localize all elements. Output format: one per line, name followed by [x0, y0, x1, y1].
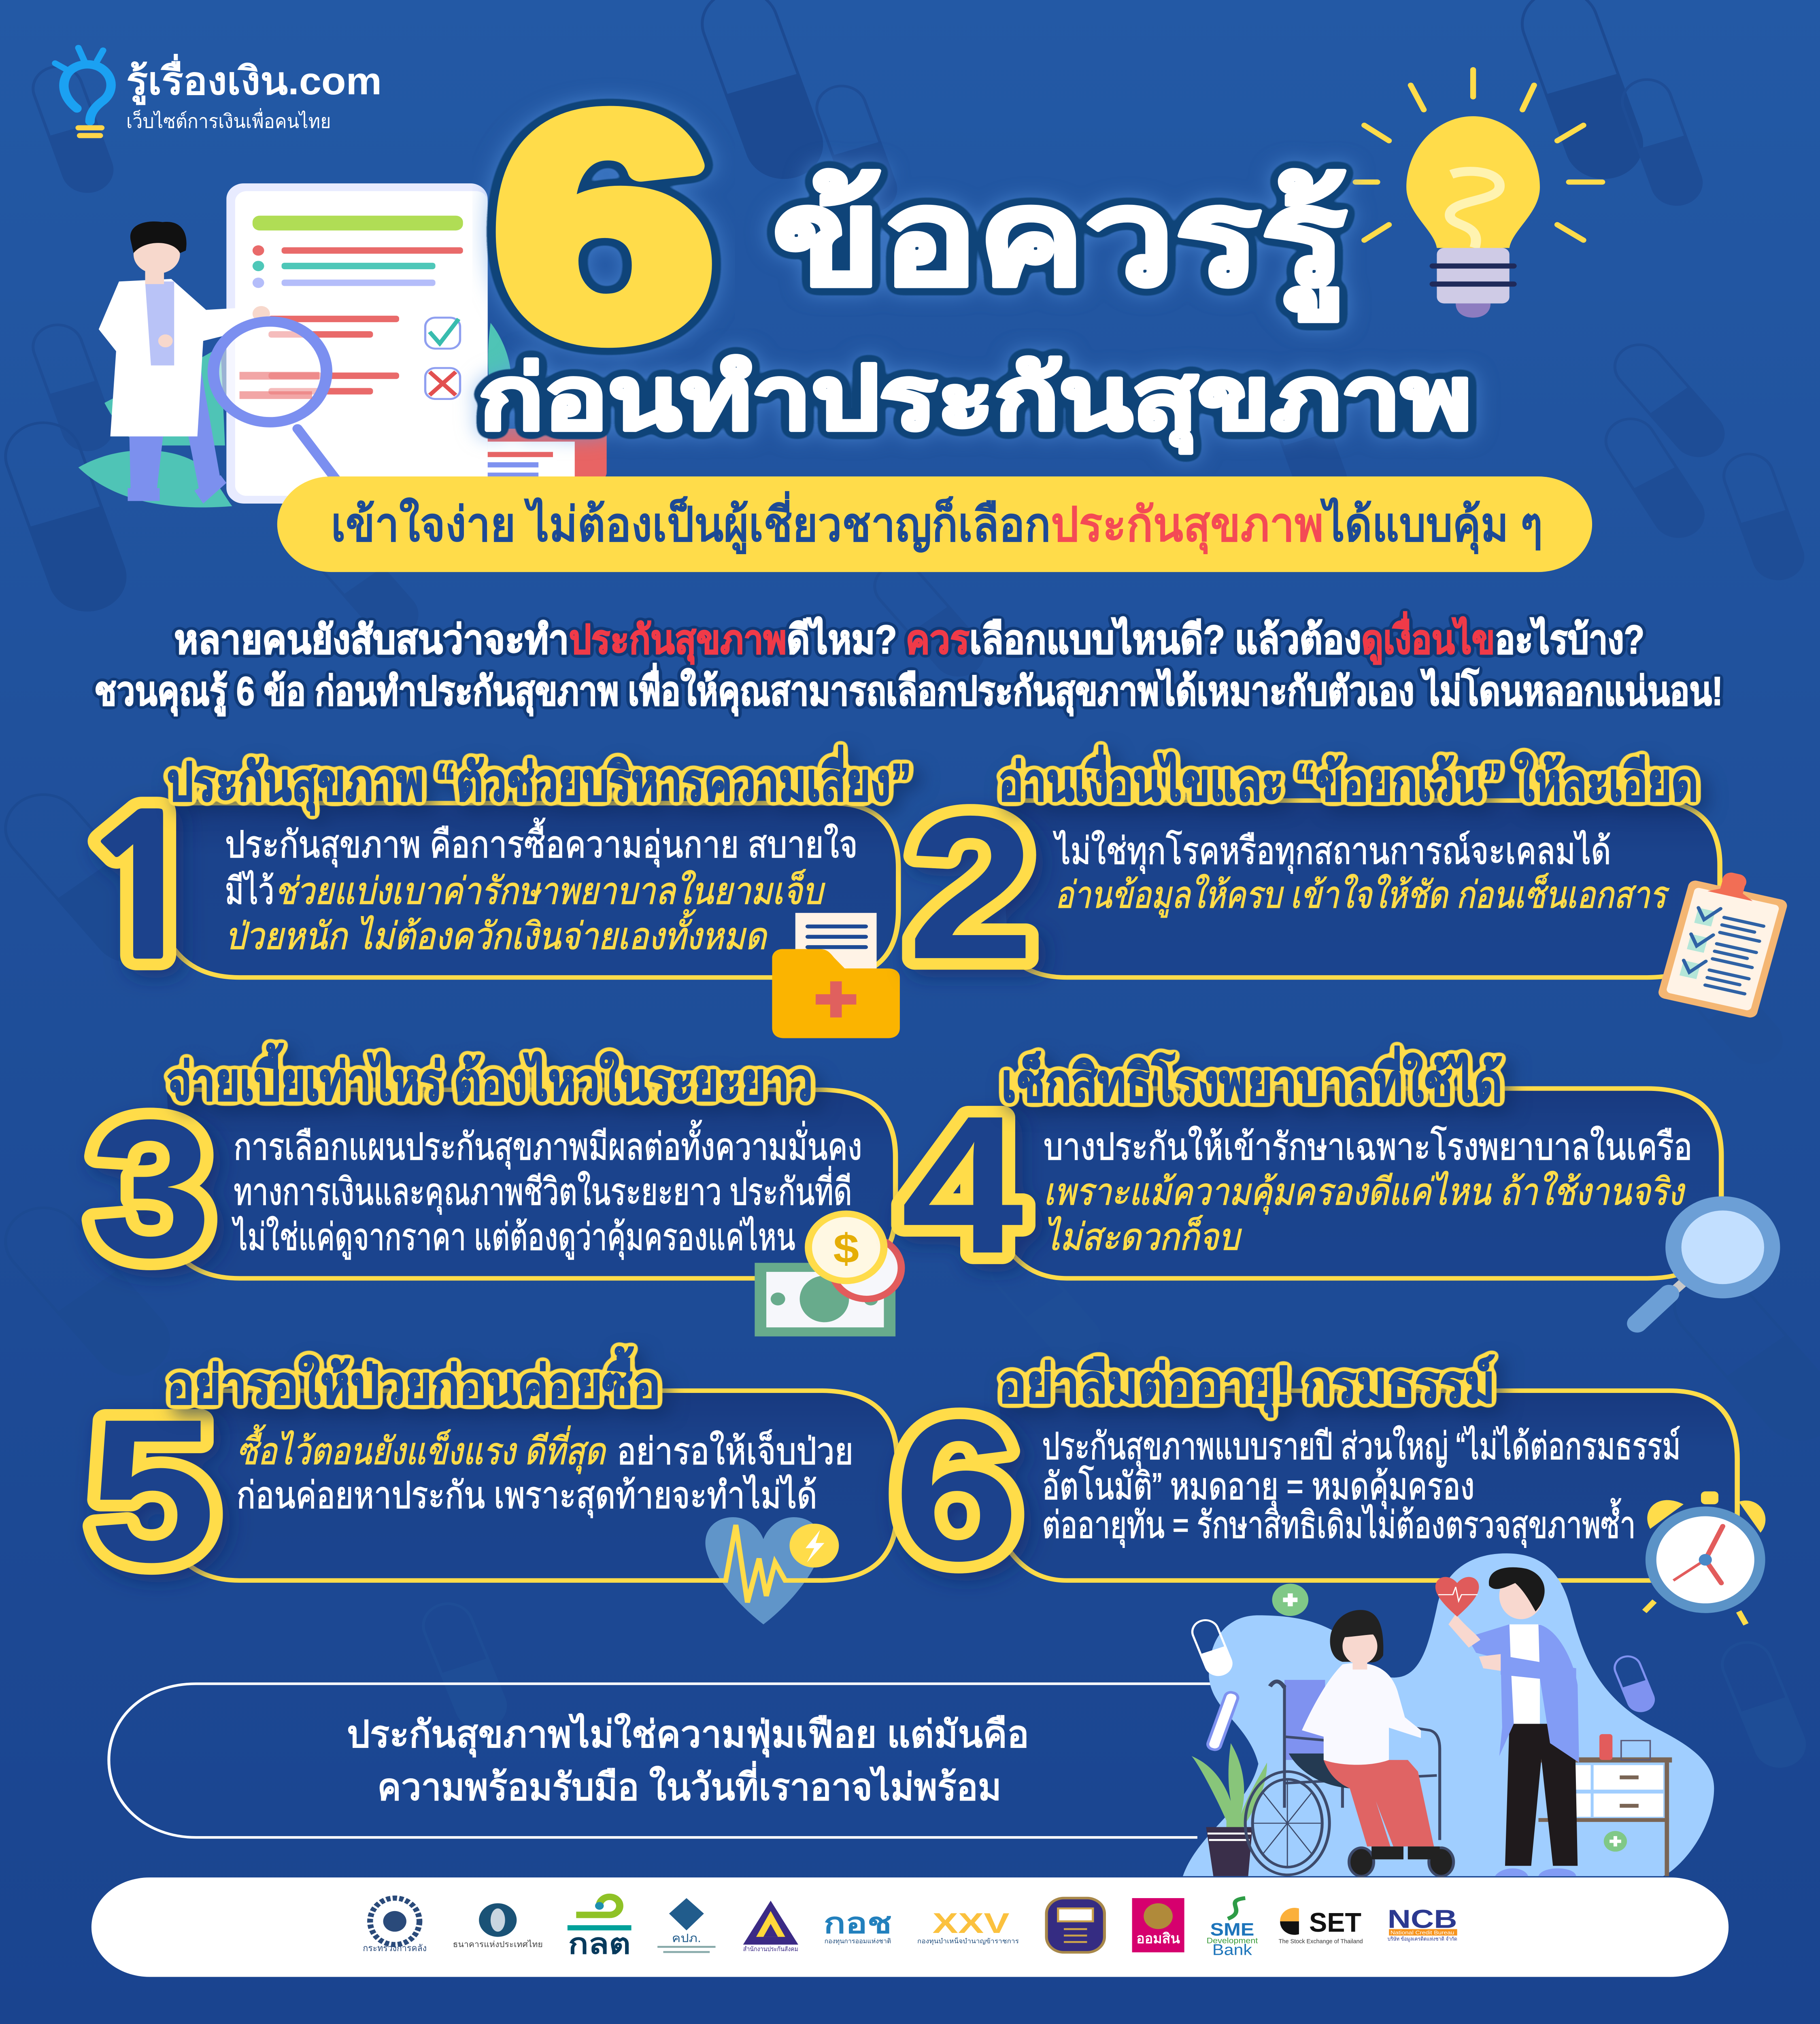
body 1: ช่วยแบ่งเบาค่ารักษาพยาบาลในยามเจ็บ [274, 869, 825, 912]
logo: คปภ: คปภ. [672, 1932, 701, 1945]
small plus badge [1604, 1831, 1627, 1852]
title numeral 6: 6 [494, 52, 713, 401]
logo tagline: เว็บไซต์การเงินเพื่อคนไทย [126, 108, 331, 132]
logo: รู้เรื่องเงิน.com [55, 48, 382, 136]
icon: heart with pulse [705, 1517, 839, 1624]
callout [109, 1684, 1212, 1837]
icon: alarm clock [1644, 1491, 1765, 1624]
intro paragraph: ประกันสุขภาพ [569, 618, 787, 665]
illustration: doctor with checklist board [79, 183, 607, 508]
logo: ออมสิน [1132, 1898, 1184, 1952]
panel 1 [78, 745, 912, 1038]
icon: clipboard [1657, 864, 1793, 1019]
logo: NCB [1388, 1905, 1457, 1942]
panel 5 [89, 1346, 897, 1624]
logo: SET [1279, 1907, 1363, 1945]
callout text: ความพร้อมรับมือ ในวันที่เราอาจไม่พร้อม [377, 1761, 1001, 1808]
intro paragraph: เลือกแบบไหนดี? แล้วต้อง [970, 617, 1361, 662]
intro paragraph: หลายคนยังสับสนว่าจะทำ [174, 618, 569, 662]
icon: money and coin [755, 1214, 901, 1336]
doctor [1435, 1567, 1579, 1876]
plus badge [1272, 1584, 1308, 1616]
logo: SME Development Bank: SME [1210, 1920, 1254, 1940]
logo: NCB: National Credit Bureau [1391, 1930, 1454, 1935]
body 3: การเลือกแผนประกันสุขภาพมีผลต่อทั้งความมั่นคง [234, 1120, 862, 1169]
panel 4 [901, 1046, 1772, 1324]
logo: triangle office: สำนักงานประกันสังคม [743, 1945, 798, 1953]
logo: SET: The Stock Exchange of Thailand [1279, 1938, 1363, 1945]
subtitle text [331, 491, 1543, 554]
heading 4: เช็กสิทธิโรงพยาบาลที่ใช้ได้ [1001, 1046, 1502, 1113]
number 6: 6 [893, 1378, 1019, 1603]
subtitle text: ได้แบบคุ้ม ๆ [1320, 497, 1543, 554]
capsule white [1189, 1617, 1235, 1678]
intro paragraph: ดีไหม? [787, 617, 897, 662]
body 3: ไม่ใช่แค่ดูจากราคา แต่ต้องดูว่าคุ้มครองแค่ไหน [232, 1216, 795, 1260]
body 4: ไม่สะดวกก็จบ [1044, 1215, 1242, 1258]
intro paragraph: อะไรบ้าง? [1495, 617, 1644, 662]
number 2: 2 [907, 774, 1035, 1001]
body 3: ทางการเงินและคุณภาพชีวิตในระยะยาว ประกันที่ดี [234, 1166, 852, 1215]
number 1: 1 [78, 793, 210, 986]
body 1: มีไว้ [225, 870, 274, 912]
logo: ออมสิน: ออมสิน [1136, 1930, 1180, 1946]
panel 2 [907, 745, 1793, 1019]
logo: กบข: กองทุนบำเหน็จบำนาญข้าราชการ [917, 1937, 1019, 1945]
number 5: 5 [89, 1377, 216, 1605]
body 2 [1053, 830, 1669, 918]
illustration: doctor and patient in wheelchair [1183, 1553, 1714, 1876]
title [479, 52, 1472, 453]
logo: ธนาคารแห่งประเทศไทย: ธนาคารแห่งประเทศไทย [453, 1939, 543, 1949]
body 4 [1044, 1126, 1692, 1258]
leaves [79, 346, 232, 508]
body 6: อัตโนมัติ” หมดอายุ = หมดคุ้มครอง [1042, 1465, 1475, 1509]
test tube [1206, 1691, 1240, 1751]
logo: กอช: กองทุนการออมแห่งชาติ [824, 1938, 891, 1945]
body 1: ประกันสุขภาพ คือการซื้อความอุ่นกาย สบายใจ [225, 817, 858, 867]
panel 3 [89, 1043, 901, 1336]
logo: กลต: กลต [568, 1928, 631, 1960]
logo: กระทรวงการคลัง [363, 1898, 427, 1953]
intro paragraph: ควร [906, 618, 970, 662]
body 5: ก่อนค่อยหาประกัน เพราะสุดท้ายจะทำไม่ได้ [236, 1474, 817, 1518]
logo: triangle office [743, 1901, 798, 1953]
number 3: 3 [89, 1079, 212, 1298]
doctor figure [99, 221, 270, 504]
red folder behind title [444, 429, 607, 480]
intro paragraph [94, 612, 1723, 716]
logo: SET: SET [1309, 1907, 1361, 1938]
logo: คปภ [657, 1898, 716, 1953]
logo: NCB: บริษัท ข้อมูลเครดิตแห่งชาติ จำกัด [1388, 1936, 1457, 1942]
logo: กบข: XXV [933, 1907, 1010, 1939]
patient [1302, 1610, 1440, 1859]
icon: money and coin: $ [833, 1226, 859, 1272]
wheelchair [1245, 1680, 1454, 1876]
subtitle text: เข้าใจง่าย ไม่ต้องเป็นผู้เชี่ยวชาญก็เลือก [331, 491, 1051, 554]
panel 6 [893, 1355, 1737, 1603]
heading 1: ประกันสุขภาพ “ตัวช่วยบริหารความเสี่ยง” [167, 745, 912, 815]
body 6 [1042, 1425, 1681, 1548]
footer logo strip [91, 1877, 1729, 1977]
body 5 [236, 1424, 853, 1518]
icon: magnifier [1637, 1203, 1772, 1324]
number 4: 4 [901, 1075, 1025, 1295]
logo: ธนาคารแห่งประเทศไทย [453, 1903, 543, 1949]
logo: SME Development Bank [1207, 1898, 1258, 1958]
logo: กระทรวงการคลัง: กระทรวงการคลัง [363, 1943, 427, 1953]
callout text [347, 1713, 1029, 1808]
body 3 [232, 1120, 862, 1260]
checklist board [226, 183, 488, 504]
cabinet [1537, 1734, 1672, 1876]
blob [1183, 1553, 1714, 1876]
icon: logo bulb [55, 48, 111, 136]
logo: กลต [568, 1897, 631, 1960]
logo: SME Development Bank: Bank [1212, 1941, 1252, 1958]
body 5: ซื้อไว้ตอนยังแข็งแรง ดีที่สุด [236, 1424, 607, 1474]
subtitle text: ประกันสุขภาพ [1051, 497, 1324, 554]
heading 5: อย่ารอให้ป่วยก่อนค่อยซื้อ [167, 1346, 660, 1415]
logo: SME Development Bank: Development [1207, 1937, 1258, 1945]
heading 3: จ่ายเบี้ยเท่าไหร่ ต้องไหวในระยะยาว [167, 1043, 813, 1112]
magnifying glass [213, 321, 337, 480]
heart held by doctor [1435, 1577, 1479, 1617]
plant behind title [488, 323, 511, 420]
logo: กบข [917, 1907, 1019, 1945]
callout text: ประกันสุขภาพไม่ใช่ความฟุ่มเฟือย แต่มันคือ [347, 1713, 1029, 1758]
icon: medical folder [772, 913, 900, 1038]
body 1 [225, 817, 858, 957]
body 2: ไม่ใช่ทุกโรคหรือทุกสถานการณ์จะเคลมได้ [1053, 830, 1611, 874]
logo: กอช: กอช [824, 1907, 892, 1939]
capsule blue [1611, 1653, 1657, 1714]
heading 6: อย่าลืมต่ออายุ! กรมธรรม์ [999, 1355, 1495, 1417]
subtitle pill [277, 476, 1592, 572]
icon: light bulb [1356, 70, 1602, 318]
potted plant [1192, 1743, 1267, 1876]
body 1: ป่วยหนัก ไม่ต้องควักเงินจ่ายเองทั้งหมด [225, 909, 768, 957]
logo: NCB: NCB [1388, 1905, 1457, 1933]
logo: purple roundel [1046, 1898, 1104, 1952]
title line: ก่อนทำประกันสุขภาพ: ก่อนทำประกันสุขภาพ [479, 349, 1472, 453]
logo wordmark: รู้เรื่องเงิน.com [126, 53, 382, 105]
title line: ข้อควรรู้: ข้อควรรู้ [772, 163, 1347, 322]
intro paragraph: ดูเงื่อนไข [1361, 612, 1495, 664]
body 5: อย่ารอให้เจ็บป่วย [617, 1429, 853, 1472]
